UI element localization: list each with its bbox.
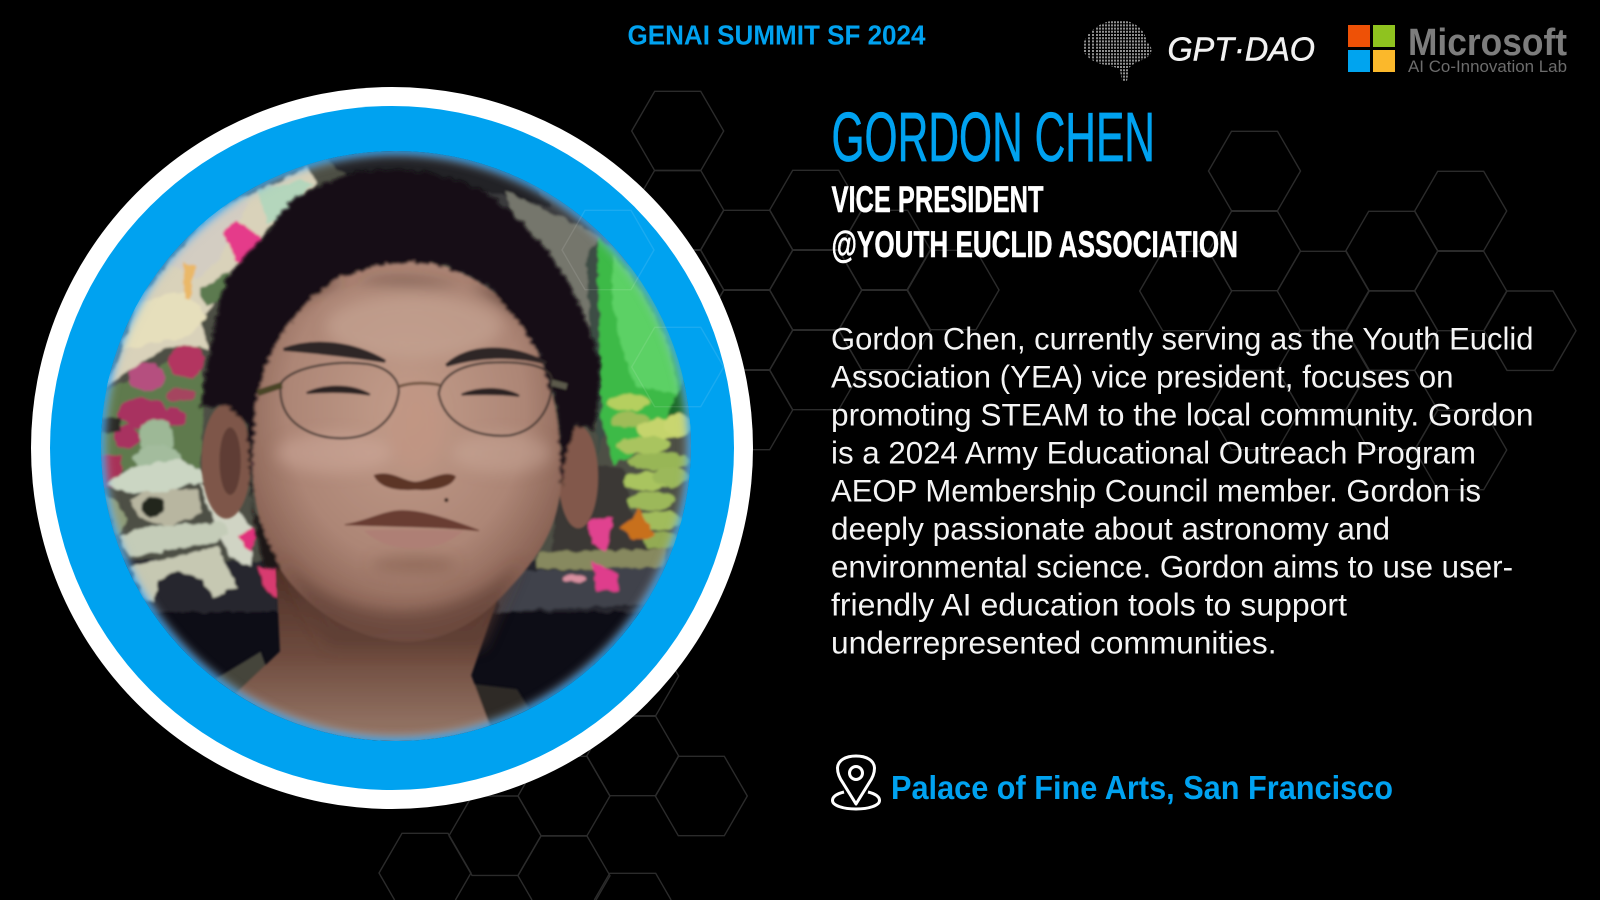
venue location: Palace of Fine Arts, San Francisco [891, 769, 1393, 806]
photo foreground: person [200, 170, 600, 759]
speaker biography: Association (YEA) vice president, focuses on [831, 358, 1454, 394]
speaker biography: is a 2024 Army Educational Outreach Program [831, 434, 1476, 470]
mouth [369, 530, 454, 542]
icon: dotted brain [1085, 18, 1151, 84]
photo background: aquarium [101, 151, 691, 741]
event title: GENAI SUMMIT SF 2024 [628, 20, 926, 50]
background hexagon pattern [379, 91, 1576, 900]
portrait circle [31, 87, 753, 809]
speaker biography: Gordon Chen, currently serving as the Youth Euclid [831, 320, 1534, 356]
speaker biography: friendly AI education tools to support [831, 586, 1347, 622]
speaker role: VICE PRESIDENT [832, 179, 1044, 220]
blue ring [50, 106, 734, 790]
speaker role: @YOUTH EUCLID ASSOCIATION [832, 224, 1238, 265]
glasses [258, 362, 567, 438]
eyes [307, 387, 370, 395]
hair [200, 170, 600, 568]
logo: Microsoft AI Co-Innovation Lab: Microsoft [1408, 22, 1567, 64]
icon: location pin [832, 756, 880, 809]
soft blue edge of photo [99, 149, 693, 743]
face [251, 256, 561, 642]
ears [201, 404, 251, 519]
cream flowers [100, 167, 317, 390]
white outer ring [31, 87, 753, 809]
nose [374, 473, 456, 490]
speaker biography: promoting STEAM to the local community. Gordon [831, 396, 1534, 432]
faint hexagons over ring [562, 210, 724, 407]
logo: Microsoft AI Co-Innovation Lab: AI Co-Innovation Lab [1408, 57, 1567, 76]
face shading [276, 278, 552, 648]
speaker biography: AEOP Membership Council member. Gordon is [831, 472, 1481, 508]
speaker biography: underrepresented communities. [831, 624, 1276, 660]
speaker name: GORDON CHEN [832, 98, 1155, 176]
stone lantern [139, 418, 175, 456]
portrait photo [101, 151, 691, 741]
green plant with pink flowers [95, 347, 205, 470]
eyebrows [284, 343, 385, 361]
shirt [216, 651, 266, 694]
speaker biography: deeply passionate about astronomy and [831, 510, 1390, 546]
speaker role [832, 179, 1238, 265]
speaker biography [831, 320, 1534, 660]
logo: GPT-DAO: GPT·DAO [1168, 30, 1315, 68]
neck [236, 568, 496, 741]
logo: Microsoft AI Co-Innovation Lab [1348, 22, 1567, 76]
speaker biography: environmental science. Gordon aims to use user- [831, 548, 1513, 584]
logo: GPT-DAO [1085, 18, 1315, 84]
